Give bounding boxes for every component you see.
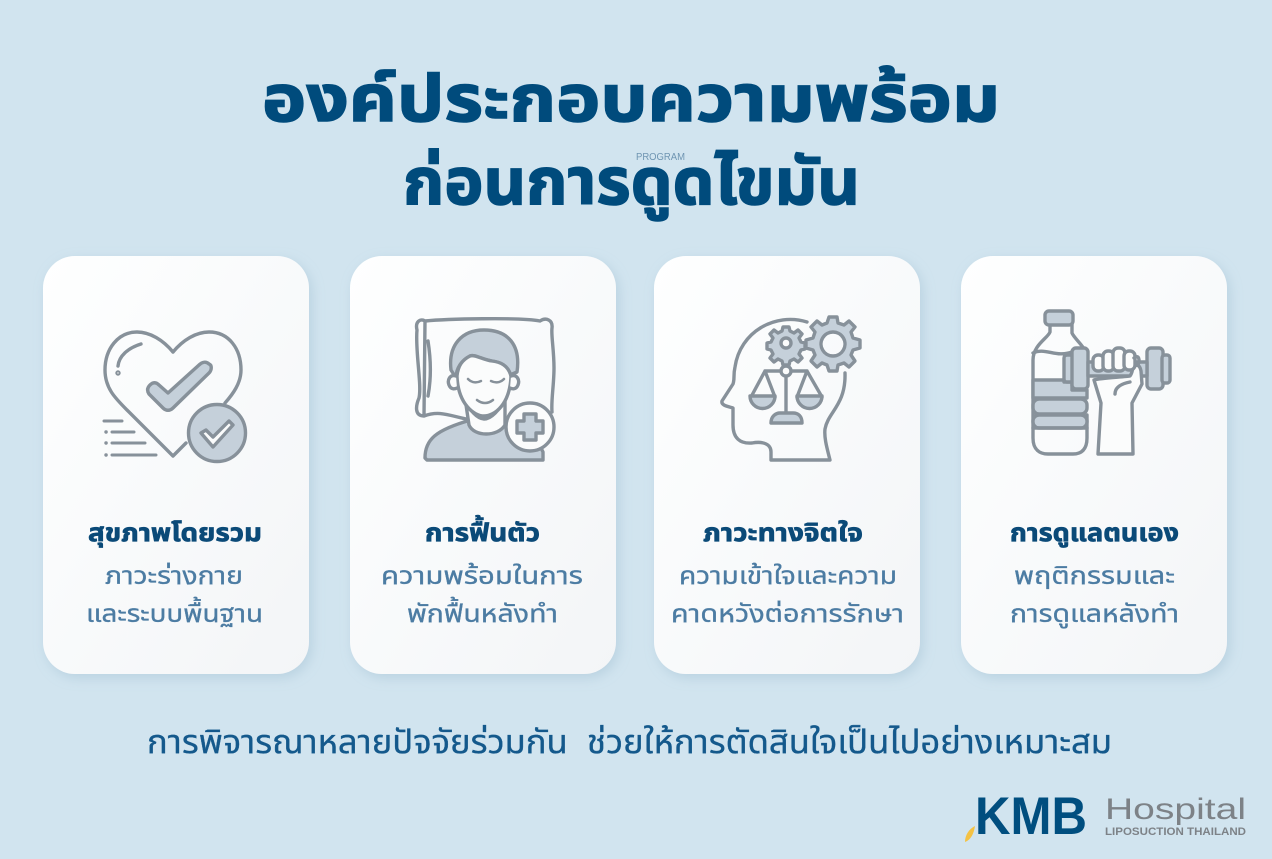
logo: KMB Hospital: Hospital [1105, 793, 1246, 826]
logo: KMB Hospital [965, 787, 1246, 846]
description [86, 562, 263, 628]
logo: KMB Hospital: KMB [975, 787, 1087, 846]
description: ความเข้าใจและความ [679, 562, 897, 590]
panel: mental state [654, 256, 920, 674]
heading: การดูแลตนเอง [1010, 519, 1179, 548]
description: ความพร้อมในการ [381, 562, 583, 590]
icon part: small gear [767, 327, 805, 365]
footer statement: การพิจารณาหลายปัจจัยร่วมกัน ช่วยให้การตัดสินใจเป็นไปอย่างเหมาะสม [147, 723, 1112, 760]
description [381, 562, 583, 628]
icon: sleeping person with pillow [417, 319, 554, 460]
title: ก่อนการดูดไขมัน [403, 145, 860, 221]
icon: heart with check [104, 332, 246, 462]
description: พฤติกรรมและ [1014, 562, 1175, 590]
icon part: large gear [806, 317, 860, 371]
description: คาดหวังต่อการรักษา [671, 600, 904, 628]
title [262, 62, 1000, 221]
description [671, 562, 904, 628]
panel: overall health [43, 256, 309, 674]
title: องค์ประกอบความพร้อม [262, 62, 1000, 135]
panel: recovery [350, 256, 616, 674]
icon: water bottle and dumbbell [1033, 311, 1170, 454]
description [1010, 562, 1179, 629]
heading: ภาวะทางจิตใจ [703, 519, 863, 547]
description: ภาวะร่างกาย [105, 562, 243, 590]
heading: สุขภาพโดยรวม [88, 519, 262, 548]
heading: การฟื้นตัว [425, 515, 540, 547]
description: และระบบพื้นฐาน [86, 596, 263, 628]
description: พักฟื้นหลังทำ [407, 596, 558, 628]
icon: head with gears and scales [722, 317, 860, 460]
logo mark: yellow leaf [965, 826, 975, 842]
panel: self care [961, 256, 1227, 674]
description: การดูแลหลังทำ [1010, 600, 1179, 629]
small label: PROGRAM: PROGRAM [636, 152, 685, 163]
logo: KMB Hospital: LIPOSUCTION THAILAND [1105, 826, 1246, 838]
